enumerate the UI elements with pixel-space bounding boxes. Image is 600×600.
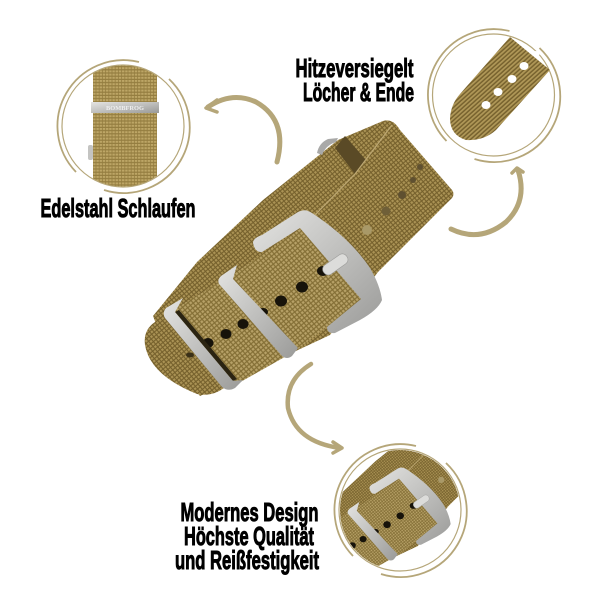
heading: Hitzeversiegelt Löcher & Ende [296, 53, 414, 107]
arrow: to loop detail [206, 98, 280, 162]
heading: Modernes Design Höchste Qualität und Reißfestigkeit: Höchste Qualität [184, 521, 314, 551]
detail ring [57, 60, 190, 193]
punched holes [482, 51, 540, 109]
loop engraving: BOMBFROG [106, 106, 144, 112]
panel: sealed holes and end detail [428, 29, 560, 162]
panel: buckle detail [334, 443, 468, 578]
buckle close-up [340, 450, 458, 566]
strap tail close-up [450, 37, 550, 140]
arrow: to buckle detail [288, 364, 342, 453]
heading: Hitzeversiegelt Löcher & Ende: Hitzeversiegelt [296, 53, 414, 83]
heading: Edelstahl Schlaufen: Edelstahl Schlaufen [40, 193, 196, 223]
detail ring [428, 29, 560, 162]
heading: Modernes Design Höchste Qualität und Reißfestigkeit: und Reißfestigkeit [175, 545, 319, 575]
heading: Hitzeversiegelt Löcher & Ende: Löcher & Ende [303, 77, 414, 107]
detail ring [334, 444, 467, 577]
arrow: to end detail [451, 168, 523, 235]
heading: Modernes Design Höchste Qualität und Reißfestigkeit: Modernes Design [180, 497, 318, 527]
main product: watch strap [145, 120, 453, 396]
panel: stainless steel loop detail [57, 60, 190, 193]
strap close-up with steel loop [88, 64, 159, 188]
heading: Modernes Design Höchste Qualität und Reißfestigkeit [175, 497, 319, 575]
